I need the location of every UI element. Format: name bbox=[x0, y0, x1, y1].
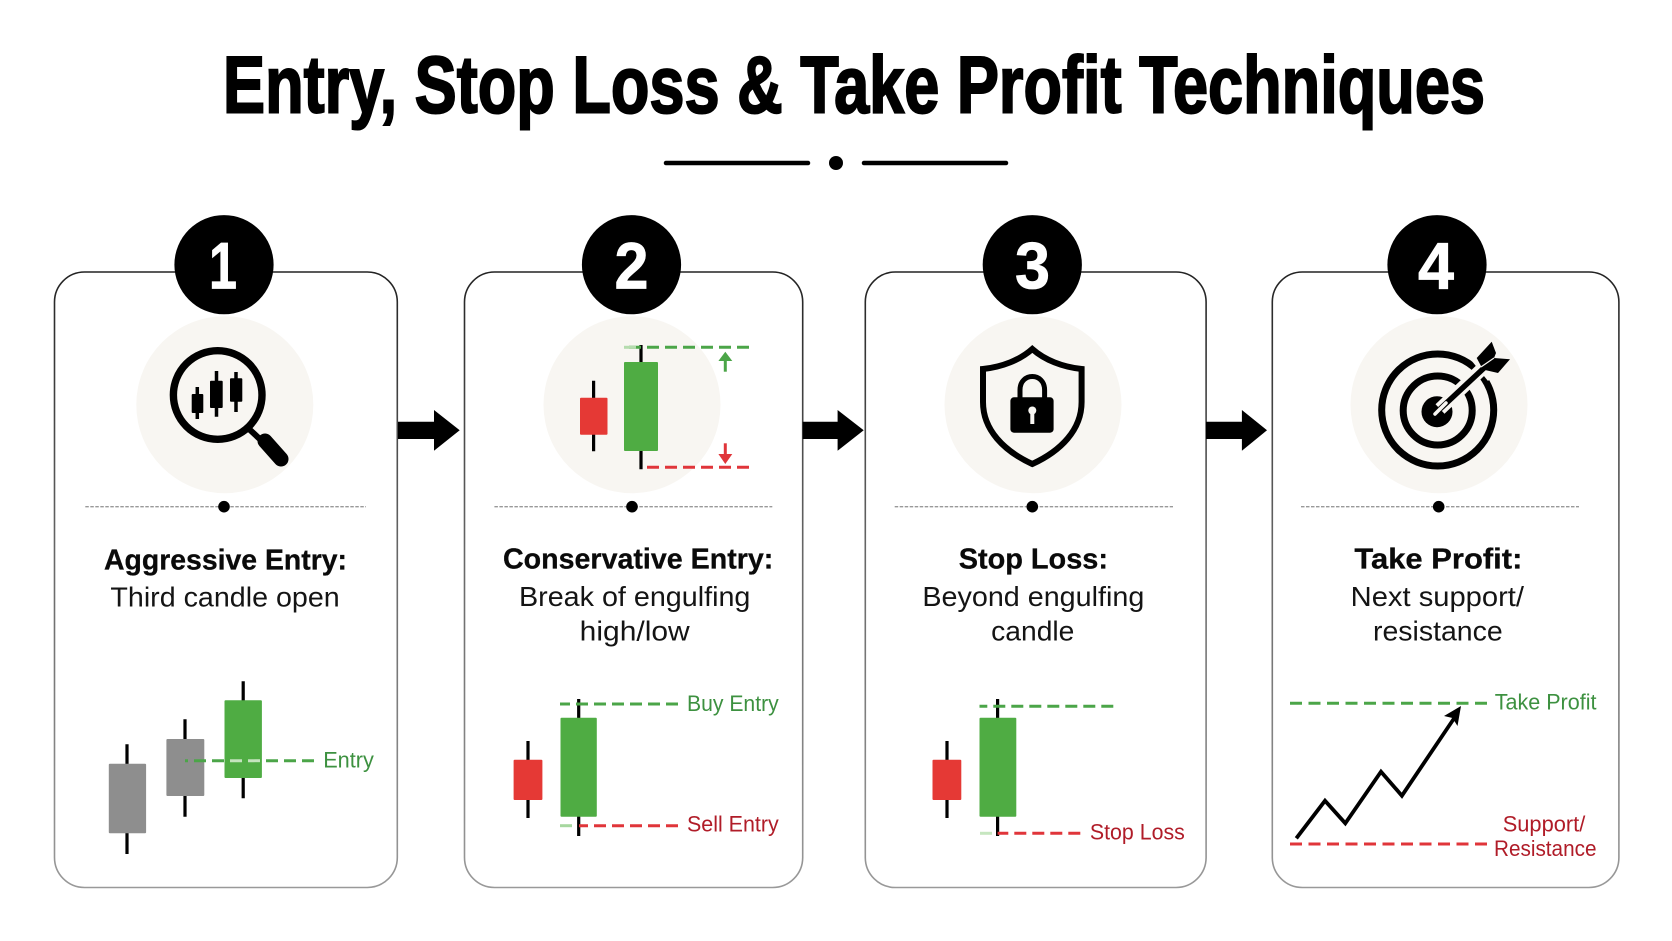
number badge 1: 1 bbox=[209, 228, 237, 302]
description: candle bbox=[991, 616, 1074, 647]
number badge 3: 3 bbox=[1015, 228, 1050, 302]
number badge 4: 4 bbox=[1418, 228, 1454, 302]
arrow 2 to 3 bbox=[803, 410, 864, 451]
arrow 1 to 2 bbox=[398, 410, 460, 451]
label: buy entry: Buy Entry bbox=[687, 691, 779, 716]
panel: stop loss bbox=[865, 215, 1206, 888]
title divider bbox=[666, 156, 1006, 170]
label: sell entry: Sell Entry bbox=[687, 811, 779, 836]
description bbox=[922, 581, 1144, 647]
chart: entry candles bbox=[109, 681, 374, 854]
arrow 3 to 4 bbox=[1206, 410, 1267, 451]
label: entry: Entry bbox=[323, 748, 374, 773]
divider bbox=[1301, 501, 1579, 512]
label: support/resistance: Support/ bbox=[1503, 811, 1586, 836]
icon: shield with padlock bbox=[944, 316, 1122, 493]
divider bbox=[494, 501, 772, 512]
icon: magnifier with candles bbox=[136, 316, 313, 493]
number badge 4 bbox=[1387, 215, 1487, 314]
panel: conservative entry bbox=[464, 215, 803, 888]
label: support/resistance: Resistance bbox=[1494, 836, 1596, 861]
label: stop loss: Stop Loss bbox=[1090, 819, 1185, 844]
description: Next support/ bbox=[1351, 581, 1524, 612]
heading: Aggressive Entry: bbox=[104, 544, 347, 576]
label: support/resistance bbox=[1494, 811, 1596, 861]
heading: Stop Loss: bbox=[959, 543, 1108, 575]
description: Break of engulfing bbox=[519, 581, 750, 612]
number badge 2 bbox=[582, 215, 681, 314]
description: high/low bbox=[580, 616, 691, 647]
heading: Conservative Entry: bbox=[503, 543, 773, 575]
icon: engulfing candle with breakout levels bbox=[544, 316, 749, 493]
description: Third candle open bbox=[110, 582, 340, 613]
chart: buy and sell entry levels bbox=[514, 691, 779, 836]
divider bbox=[895, 501, 1173, 512]
icon: target with arrow bbox=[1350, 316, 1528, 493]
panel: take profit bbox=[1272, 215, 1619, 888]
chart: price rising to take profit bbox=[1290, 689, 1596, 861]
number badge 1 bbox=[174, 215, 274, 314]
label: take profit: Take Profit bbox=[1495, 689, 1596, 714]
description: Beyond engulfing bbox=[922, 581, 1144, 612]
heading: Take Profit: bbox=[1354, 543, 1522, 575]
chart: stop loss level bbox=[932, 699, 1185, 844]
description bbox=[1351, 581, 1524, 647]
description bbox=[519, 581, 750, 647]
number badge 3 bbox=[983, 215, 1082, 314]
panel: aggressive entry bbox=[54, 215, 397, 888]
description: resistance bbox=[1373, 616, 1503, 647]
divider bbox=[85, 501, 366, 512]
number badge 2: 2 bbox=[614, 228, 648, 302]
